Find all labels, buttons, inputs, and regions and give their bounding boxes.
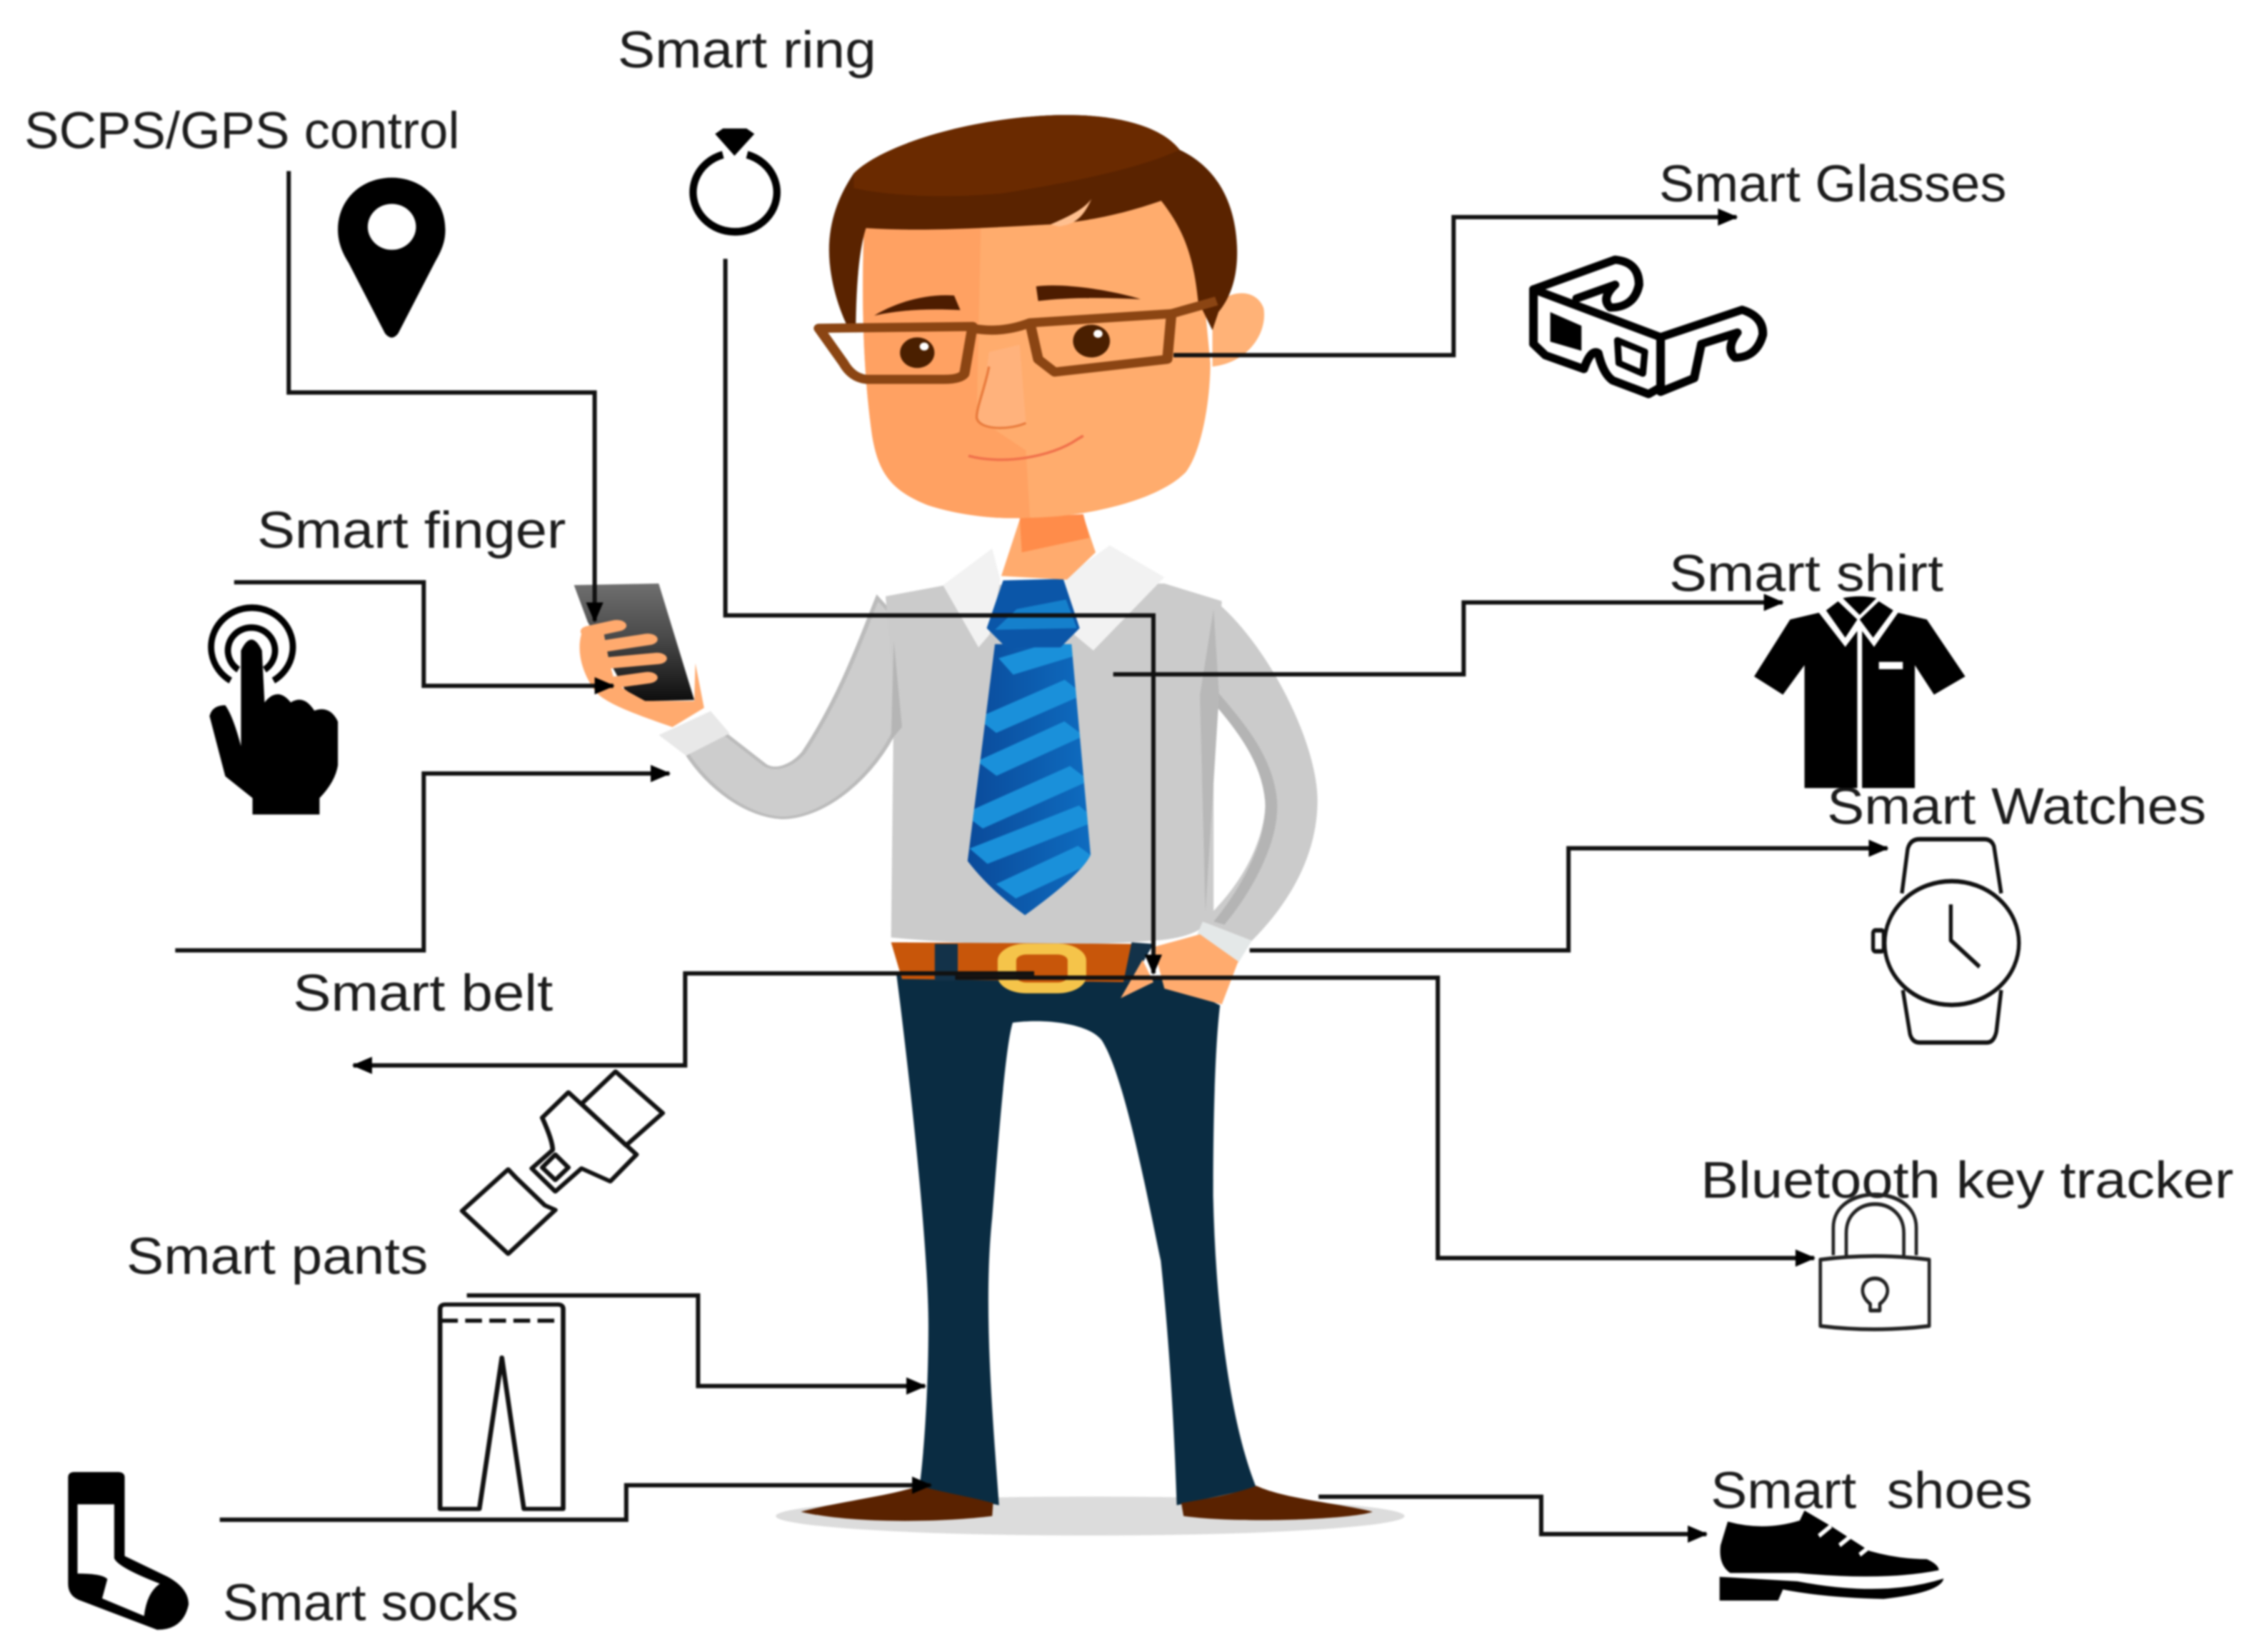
icon: padlock (1821, 1194, 1929, 1329)
connector: left wrist (175, 774, 669, 951)
label: Smart shoes: Smart shoes (1711, 1462, 2033, 1520)
icon: finger touch (209, 608, 338, 814)
connector: shoes (1318, 1497, 1706, 1534)
connector: pants (467, 1296, 925, 1386)
connector: watch (1250, 848, 1888, 951)
label: Smart pants: Smart pants (126, 1228, 428, 1286)
icon: wrist watch (1873, 839, 2019, 1043)
icon: seat belt buckle (462, 1071, 663, 1253)
ground shadow (776, 1496, 1404, 1536)
label: Smart belt: Smart belt (293, 964, 553, 1022)
connector: socks (220, 1485, 931, 1520)
icon: shirt (1754, 596, 1965, 788)
icon: shoe (1720, 1511, 1943, 1601)
connector: GPS to phone (289, 171, 595, 621)
connector: ring to hand (726, 259, 1153, 973)
character: man in shirt and tie holding a phone (574, 115, 1404, 1536)
shirt, arms, tie, belt and hands (574, 545, 1318, 1004)
label: Smart Glasses: Smart Glasses (1659, 155, 2006, 213)
connector: shirt (1114, 602, 1783, 674)
connector: smart finger (234, 582, 614, 686)
label: Smart shirt: Smart shirt (1669, 544, 1943, 602)
label: Bluetooth key tracker: Bluetooth key tracker (1701, 1151, 2233, 1209)
connector: key tracker (955, 978, 1814, 1258)
icon: location pin (338, 178, 445, 338)
connector: glasses (1173, 217, 1736, 355)
connector: belt (354, 973, 1034, 1066)
icon: 3D glasses (1533, 260, 1763, 394)
label: Smart finger: Smart finger (257, 501, 566, 559)
trousers and shoes (801, 975, 1373, 1521)
icon: pants (440, 1305, 563, 1509)
head with hair and glasses (819, 115, 1264, 580)
label: SCPS/GPS control: SCPS/GPS control (24, 101, 460, 159)
label: Smart ring: Smart ring (618, 21, 876, 79)
icon: sock (68, 1472, 189, 1630)
label: Smart socks: Smart socks (223, 1574, 519, 1632)
icon: diamond ring (693, 129, 777, 231)
label: Smart Watches: Smart Watches (1827, 777, 2206, 835)
